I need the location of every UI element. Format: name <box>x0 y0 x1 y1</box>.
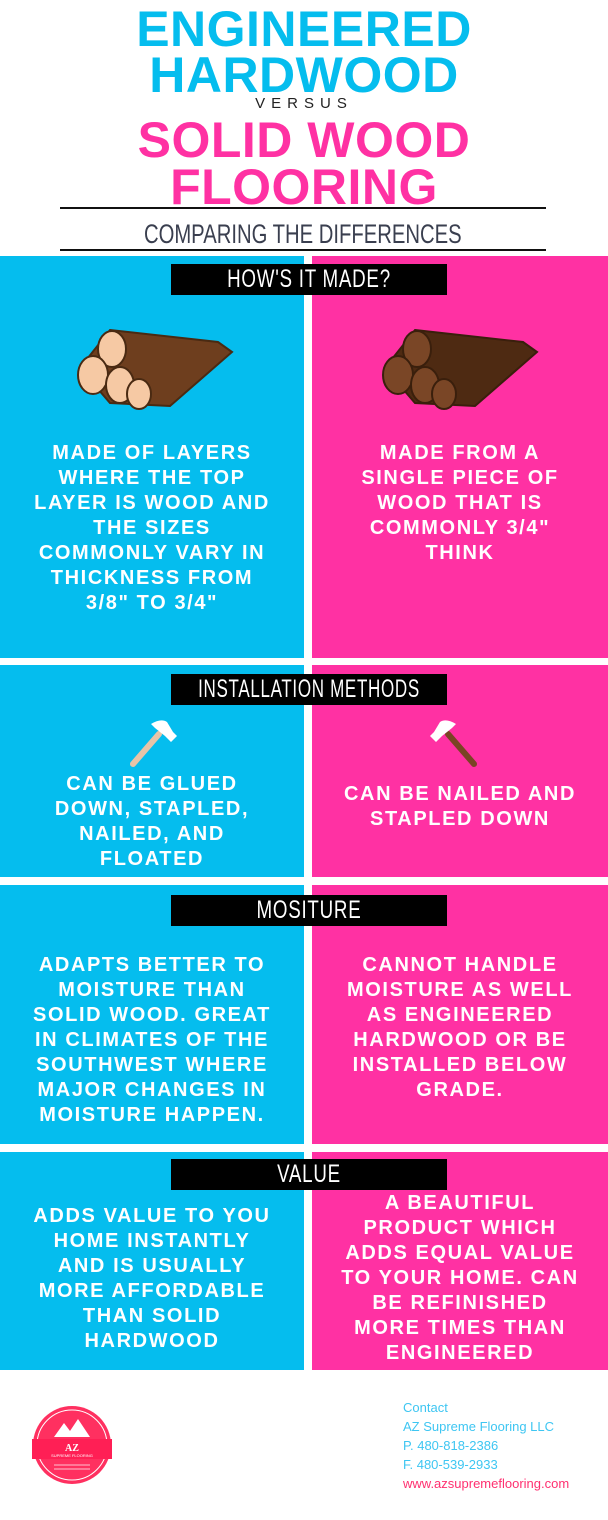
text: made right: MADE FROM A <box>380 442 540 464</box>
text: moisture left: ADAPTS BETTER TO <box>39 954 265 976</box>
heading: value: VALUE <box>277 1160 341 1188</box>
title: ENGINEERED <box>136 1 472 57</box>
contact block: P. 480-818-2386 <box>403 1438 498 1453</box>
text: made left: WHERE THE TOP <box>58 467 246 489</box>
text: install right <box>344 783 576 830</box>
text: value left: HOME INSTANTLY <box>54 1230 250 1252</box>
text: made right: SINGLE PIECE OF <box>361 467 559 489</box>
panel: moisture right <box>312 885 608 1144</box>
text: made left: MADE OF LAYERS <box>52 442 252 464</box>
title <box>136 1 472 215</box>
text: made left: 3/8" TO 3/4" <box>86 592 218 614</box>
text: moisture left: SOLID WOOD. GREAT <box>33 1004 271 1026</box>
title: FLOORING <box>170 159 438 215</box>
text: made left: LAYER IS WOOD AND <box>34 492 270 514</box>
text: value left: HARDWOOD <box>84 1330 220 1352</box>
text: moisture right <box>347 954 573 1101</box>
logo: SUPREME FLOORING <box>51 1453 93 1458</box>
text: value left: ADDS VALUE TO YOU <box>33 1205 271 1227</box>
text: made left: THICKNESS FROM <box>51 567 253 589</box>
text: value right: ADDS EQUAL VALUE <box>345 1242 575 1264</box>
text: value right: ENGINEERED <box>386 1342 534 1364</box>
heading: how's it made <box>171 264 447 295</box>
text: made right: WOOD THAT IS <box>377 492 543 514</box>
contact block: F. 480-539-2933 <box>403 1457 498 1472</box>
heading: installation: INSTALLATION METHODS <box>198 675 420 703</box>
icon: hammer light <box>130 720 177 767</box>
logo <box>32 1406 112 1484</box>
text: made right <box>361 442 559 564</box>
text: install left <box>55 773 249 870</box>
text: moisture left: MOISTURE THAN <box>58 979 246 1001</box>
contact block: AZ Supreme Flooring LLC <box>403 1419 554 1434</box>
text: moisture left: MOISTURE HAPPEN. <box>39 1104 265 1126</box>
text: made left: THE SIZES <box>93 517 211 539</box>
text: value right: TO YOUR HOME. CAN <box>341 1267 579 1289</box>
panel: install left <box>0 665 304 877</box>
text: moisture left: IN CLIMATES OF THE <box>35 1029 269 1051</box>
heading: how's it made: HOW'S IT MADE? <box>227 265 391 293</box>
text: moisture right: GRADE. <box>416 1079 504 1101</box>
icon: hammer dark <box>430 720 477 767</box>
text: install left: DOWN, STAPLED, <box>55 798 249 820</box>
text: install left: FLOATED <box>100 848 204 870</box>
text: moisture right: MOISTURE AS WELL <box>347 979 573 1001</box>
logo: AZ <box>65 1443 79 1454</box>
subtitle: COMPARING THE DIFFERENCES <box>144 219 462 249</box>
text: made left: COMMONLY VARY IN <box>39 542 265 564</box>
text: made left <box>34 442 270 614</box>
panel: install right <box>312 665 608 877</box>
text: moisture right: HARDWOOD OR BE <box>353 1029 567 1051</box>
heading: value <box>171 1159 447 1190</box>
text: install left: NAILED, AND <box>79 823 225 845</box>
text: moisture left <box>33 954 271 1126</box>
text: value right: BE REFINISHED <box>372 1292 548 1314</box>
contact block <box>403 1400 569 1491</box>
text: made right: THINK <box>425 542 495 564</box>
title: HARDWOOD <box>149 47 459 103</box>
text: value left: THAN SOLID <box>83 1305 221 1327</box>
title: VERSUS <box>255 95 353 112</box>
heading: moisture <box>171 895 447 926</box>
text: value right: PRODUCT WHICH <box>363 1217 556 1239</box>
text: moisture right: AS ENGINEERED <box>367 1004 553 1026</box>
text: made right: COMMONLY 3/4" <box>370 517 550 539</box>
panel: made left <box>0 256 304 658</box>
text: value right <box>341 1192 579 1364</box>
text: install right: CAN BE NAILED AND <box>344 783 576 805</box>
panel: value right <box>312 1152 608 1370</box>
panel: moisture left <box>0 885 304 1144</box>
text: value left: AND IS USUALLY <box>58 1255 246 1277</box>
text: moisture right: INSTALLED BELOW <box>353 1054 567 1076</box>
text: install left: CAN BE GLUED <box>66 773 238 795</box>
icon: light logs <box>77 329 234 410</box>
text: moisture left: SOUTHWEST WHERE <box>36 1054 268 1076</box>
icon: dark logs <box>382 329 538 410</box>
panel: made right <box>312 256 608 658</box>
heading: moisture: MOSITURE <box>257 896 361 924</box>
title: SOLID WOOD <box>138 112 470 168</box>
text: moisture left: MAJOR CHANGES IN <box>38 1079 266 1101</box>
contact block: www.azsupremeflooring.com <box>403 1476 569 1491</box>
contact block: Contact <box>403 1400 448 1415</box>
text: value left: MORE AFFORDABLE <box>39 1280 265 1302</box>
panel: value left <box>0 1152 304 1370</box>
text: value left <box>33 1205 271 1352</box>
text: moisture right: CANNOT HANDLE <box>362 954 558 976</box>
text: value right: A BEAUTIFUL <box>385 1192 535 1214</box>
text: install right: STAPLED DOWN <box>370 808 550 830</box>
text: value right: MORE TIMES THAN <box>354 1317 566 1339</box>
